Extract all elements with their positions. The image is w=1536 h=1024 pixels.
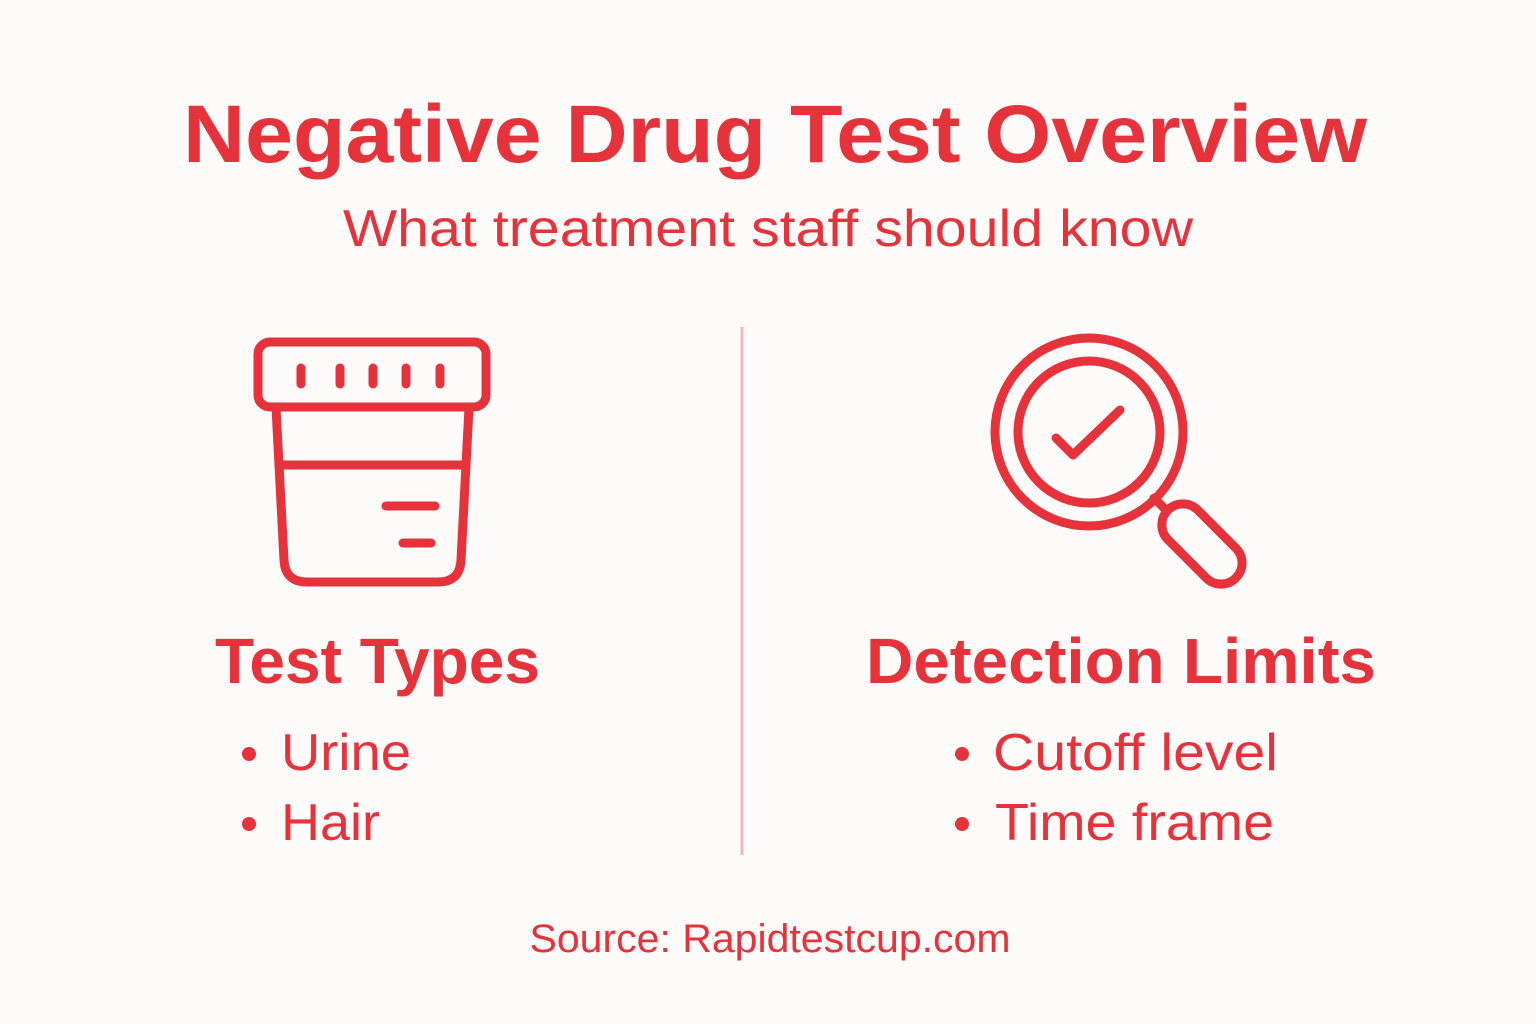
panel: test types — [215, 342, 540, 852]
source: Source: Rapidtestcup.com — [530, 917, 1010, 961]
bullet list: detection limits: Cutoff level — [993, 724, 1278, 782]
subtitle: What treatment staff should know — [343, 200, 1193, 258]
heading: detection limits: Detection Limits — [866, 625, 1376, 697]
divider — [740, 327, 744, 855]
icon: specimen cup — [258, 342, 486, 582]
bullet list: test types: Urine — [281, 724, 411, 782]
bullet list: test types: Hair — [281, 794, 380, 852]
title: Negative Drug Test Overview — [183, 89, 1367, 180]
bullet list: detection limits: Time frame — [995, 794, 1274, 852]
panel: detection limits — [866, 338, 1376, 852]
bullet list: detection limits — [955, 724, 1278, 852]
icon: magnifier with check — [995, 338, 1251, 593]
bullet list: test types — [242, 724, 411, 852]
heading: test types: Test Types — [215, 625, 540, 697]
